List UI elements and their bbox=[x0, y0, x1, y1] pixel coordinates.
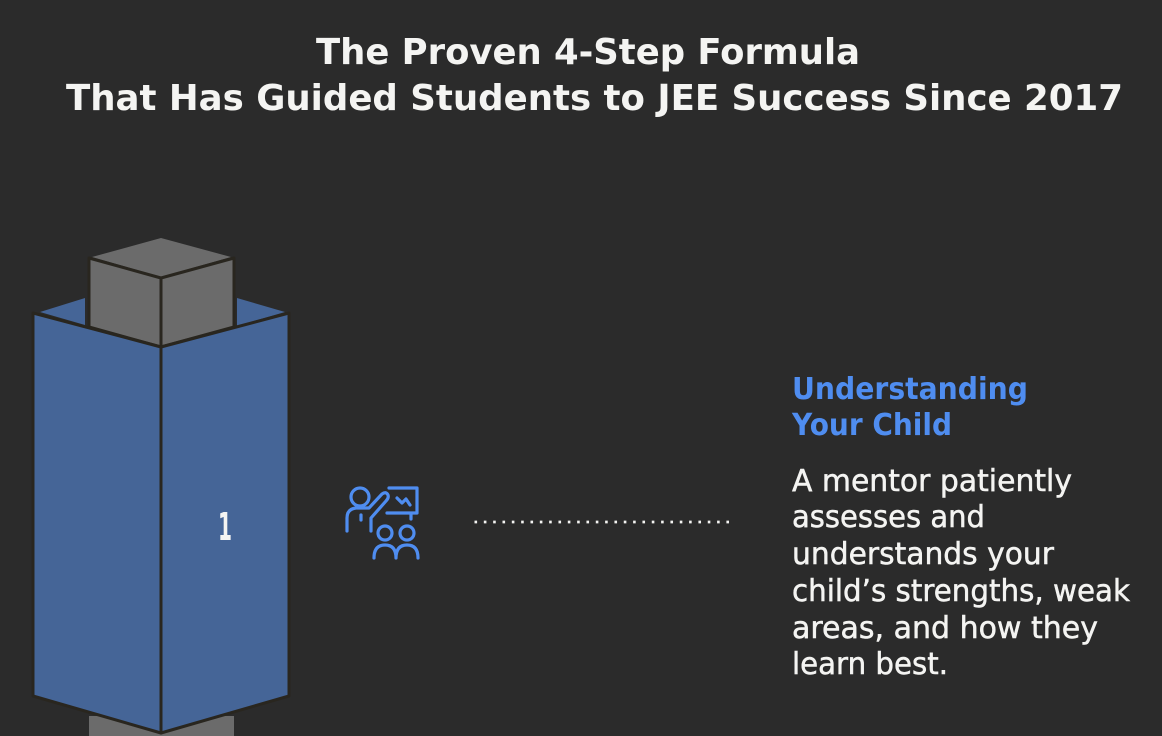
step description: areas, and how they bbox=[792, 611, 1098, 646]
step number: 1 bbox=[218, 505, 232, 549]
step description: assesses and bbox=[792, 500, 985, 535]
blue collar back faces bbox=[40, 298, 285, 326]
dotted connector bbox=[474, 521, 730, 523]
step heading bbox=[791, 372, 1028, 443]
hexagonal pillar: step 1 bbox=[33, 238, 289, 736]
step heading: Your Child bbox=[791, 408, 952, 443]
grey lower cube bbox=[89, 716, 234, 736]
step heading: Understanding bbox=[792, 372, 1028, 407]
step description: learn best. bbox=[792, 647, 948, 682]
step description: child’s strengths, weak bbox=[792, 574, 1131, 609]
blue pillar front faces bbox=[33, 313, 289, 733]
step description bbox=[792, 464, 1131, 682]
title bbox=[66, 32, 1123, 119]
step description: A mentor patiently bbox=[792, 464, 1072, 499]
title: The Proven 4-Step Formula bbox=[316, 32, 860, 73]
step description: understands your bbox=[792, 537, 1055, 572]
title: That Has Guided Students to JEE Success Since 2017 bbox=[66, 78, 1123, 119]
grey top cube bbox=[89, 238, 234, 347]
icon: mentor teaching students bbox=[347, 488, 418, 558]
